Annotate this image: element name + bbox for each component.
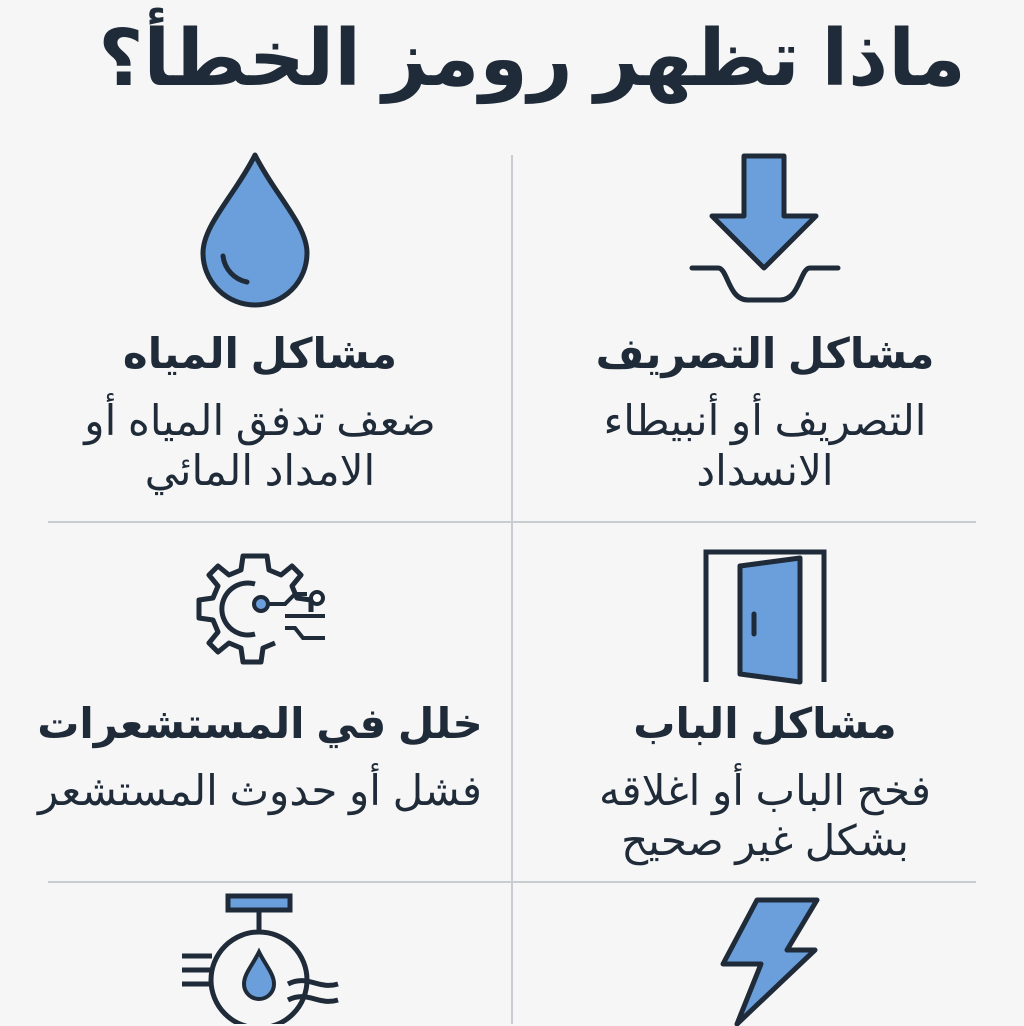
icon: lightning bolt <box>720 898 820 1026</box>
body text: فخح الباب أو اغلاقه <box>599 767 931 814</box>
panel: electrical <box>720 898 820 1026</box>
panel: sensor fault <box>36 554 483 816</box>
body text: فشل أو حدوث المستشعر <box>38 767 482 814</box>
body text: الانسداد <box>696 447 834 494</box>
panel: drainage problems <box>596 154 934 494</box>
panel: water problems <box>82 152 436 496</box>
heading: مشاكل المياه <box>123 330 397 377</box>
body text <box>599 763 931 866</box>
heading: مشاكل الباب <box>633 700 897 747</box>
body text <box>82 393 436 496</box>
body text <box>604 393 926 494</box>
body text: الامداد المائي <box>145 447 375 494</box>
body text: التصريف أو أنبيطاء <box>604 397 926 444</box>
title: ماذا تظهر رومز الخطأ؟ <box>98 14 966 102</box>
icon: arrow into drain <box>690 154 840 302</box>
body text: ضعف تدفق المياه أو <box>84 397 436 444</box>
heading: مشاكل التصريف <box>596 330 934 377</box>
heading: خلل في المستشعرات <box>37 700 483 747</box>
icon: gear with circuit <box>196 554 325 664</box>
panel: door problems <box>599 550 931 866</box>
body text: بشكل غير صحيح <box>621 817 909 864</box>
icon: door <box>704 550 826 684</box>
panel: valve <box>182 894 339 1024</box>
icon: water drop <box>200 152 310 308</box>
icon: valve with water drop <box>182 894 339 1024</box>
